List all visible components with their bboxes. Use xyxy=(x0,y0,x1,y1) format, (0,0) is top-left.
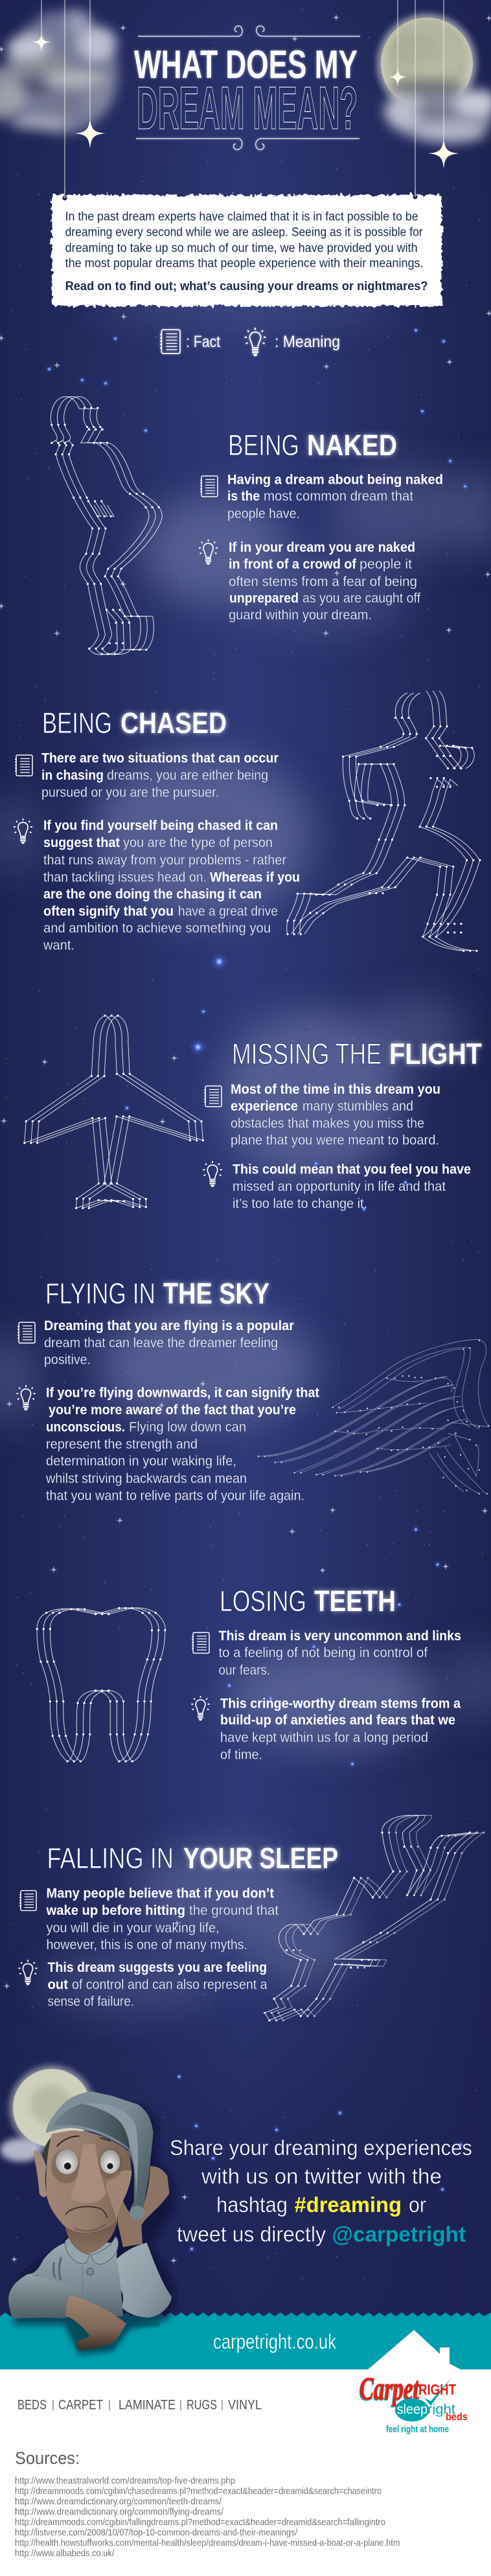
share call to action xyxy=(170,2136,472,2246)
meaning text: out xyxy=(48,1978,68,1993)
icon: meaning xyxy=(14,819,32,844)
man shadow xyxy=(13,2103,176,2355)
heading xyxy=(220,1585,396,1618)
section: being naked xyxy=(51,396,443,655)
meaning text xyxy=(229,540,420,623)
meaning text: This cringe-worthy dream stems from a xyxy=(220,1697,461,1712)
sources: http://listverse.com/2008/10/07/top-10-common-dreams-and-their-meanings/ xyxy=(15,2528,298,2538)
sources xyxy=(15,2448,400,2559)
meaning text xyxy=(43,819,300,953)
intro panel: dreaming to take up so much of our time, we have provided you with xyxy=(65,242,418,255)
fact text xyxy=(44,1318,294,1368)
right sleeve xyxy=(117,2243,172,2318)
cheek on hand xyxy=(106,2171,131,2221)
meaning text: build-up of anxieties and fears that we xyxy=(220,1713,455,1728)
collar left xyxy=(65,2237,89,2263)
meaning text: of control and can also represent a xyxy=(72,1978,268,1993)
left eye socket xyxy=(51,2149,80,2184)
sources: http://dreammoods.com/cgibin/fallingdreams.pl?method=exact&header=dreamid&search=fallingintro xyxy=(15,2518,385,2528)
meaning text: you are the type of person xyxy=(123,835,273,850)
shirt body xyxy=(8,2243,123,2318)
meaning text: and ambition to achieve something you xyxy=(43,921,271,936)
logo: carpetright sleepright beds: right xyxy=(428,2402,455,2417)
fact text: to a feeling of not being in control of xyxy=(219,1645,428,1660)
title ornaments xyxy=(136,26,360,150)
meaning text: are the one doing the chasing it can xyxy=(43,887,262,902)
section: being chased xyxy=(14,691,480,953)
shirt folds xyxy=(19,2258,61,2294)
meaning text: missed an opportunity in life and that xyxy=(233,1179,446,1194)
fact text: people have. xyxy=(227,506,300,521)
meaning text: If you’re flying downwards, it can signify that xyxy=(46,1386,319,1401)
figure: naked constellation xyxy=(51,396,162,655)
share call to action: with us on twitter with the xyxy=(201,2164,442,2188)
title: WHAT DOES MY xyxy=(134,43,358,87)
product list xyxy=(17,2398,262,2413)
meaning text xyxy=(220,1697,461,1763)
right eye socket xyxy=(98,2149,122,2180)
fact text: Dreaming that you are flying is a popular xyxy=(44,1318,294,1333)
icon: fact xyxy=(17,1322,35,1343)
product list: LAMINATE xyxy=(119,2398,176,2413)
section: losing teeth xyxy=(37,1585,461,1763)
sources: http://www.dreamdictionary.org/common/teeth-dreams/ xyxy=(15,2497,222,2507)
fact text: Most of the time in this dream you xyxy=(231,1082,440,1097)
fact text: is the xyxy=(227,489,260,504)
figure: plane constellation xyxy=(25,1015,203,1208)
fact text: This dream is very uncommon and links xyxy=(219,1629,461,1644)
share call to action: tweet us directly xyxy=(177,2222,326,2246)
heading xyxy=(42,706,227,740)
meaning text: unprepared xyxy=(229,591,299,606)
hair xyxy=(43,2135,53,2166)
title xyxy=(134,43,358,142)
figure: wing constellation xyxy=(258,1339,488,1494)
logo: carpetright sleepright beds: sleep xyxy=(397,2402,428,2417)
meaning text: that you want to relive parts of your life again. xyxy=(46,1489,304,1504)
figure: runner constellation xyxy=(287,691,480,951)
sources: http://www.dreamdictionary.org/common/flying-dreams/ xyxy=(15,2507,224,2518)
meaning text: you’re more aware of the fact that you’re xyxy=(49,1403,296,1418)
website url: carpetright.co.uk xyxy=(213,2330,337,2353)
heading: YOUR SLEEP xyxy=(183,1842,338,1875)
intro panel: In the past dream experts have claimed that it is in fact possible to be xyxy=(65,210,418,224)
placket xyxy=(82,2265,84,2299)
icon: fact xyxy=(192,1633,209,1653)
meaning text xyxy=(233,1162,471,1212)
heading: LOSING xyxy=(220,1585,306,1618)
head xyxy=(46,2130,131,2233)
heading xyxy=(45,1277,269,1310)
legend: : Fact xyxy=(186,333,220,351)
cap band xyxy=(53,2103,130,2149)
meaning text: have a great drive xyxy=(178,904,278,919)
meaning text: This dream suggests you are feeling xyxy=(48,1960,267,1975)
moon: top right xyxy=(377,14,477,113)
legend: : Meaning xyxy=(275,333,340,351)
meaning text: in front of a crowd of xyxy=(229,557,357,572)
fact text: Having a dream about being naked xyxy=(227,473,443,488)
lower hand xyxy=(66,2296,126,2350)
left eye xyxy=(56,2149,78,2175)
pupils xyxy=(64,2163,113,2169)
intro panel: dreaming every second while we are asleep. Seeing as it is possible for xyxy=(65,226,423,240)
heading: NAKED xyxy=(307,429,397,462)
fact text: many stumbles and xyxy=(303,1099,413,1114)
icon: fact xyxy=(15,755,32,776)
icon: meaning xyxy=(199,539,218,565)
meaning text: have kept within us for a long period xyxy=(220,1730,428,1745)
fact text: dreams, you are either being xyxy=(107,768,268,783)
heading xyxy=(228,429,397,462)
product list: BEDS xyxy=(17,2398,47,2413)
section: flying in the sky xyxy=(17,1277,488,1504)
fact text: pursued or you are the pursuer. xyxy=(41,785,219,800)
arm and hand xyxy=(118,2166,170,2247)
heading xyxy=(47,1842,338,1875)
sources: http://www.albabeds.co.uk/ xyxy=(15,2549,115,2559)
cloud: top right xyxy=(384,79,491,143)
meaning text: If you find yourself being chased it can xyxy=(43,819,278,833)
right eye xyxy=(100,2150,120,2174)
meaning text: whilst striving backwards can mean xyxy=(45,1471,247,1486)
meaning text: If in your dream you are naked xyxy=(229,540,415,555)
product list: VINYL xyxy=(228,2398,262,2413)
product list: CARPET xyxy=(58,2398,103,2413)
left sleeve xyxy=(8,2274,76,2318)
moon: behind character xyxy=(0,2066,94,2162)
intro panel xyxy=(52,188,442,306)
mouth xyxy=(66,2207,107,2217)
fact text xyxy=(227,473,443,521)
fact text: experience xyxy=(231,1099,298,1114)
heading: TEETH xyxy=(314,1585,396,1618)
fact text xyxy=(46,1886,279,1952)
figure: tooth constellation xyxy=(37,1608,165,1761)
meaning text: as you are caught off xyxy=(303,591,420,606)
logo: carpetright sleepright beds: RIGHT xyxy=(418,2381,456,2398)
fact text: however, this is one of many myths. xyxy=(47,1938,247,1952)
section: falling in your sleep xyxy=(18,1815,484,2020)
fact text: plane that you were meant to board. xyxy=(231,1133,439,1148)
meaning text: people it xyxy=(360,557,412,572)
share call to action: or xyxy=(409,2193,426,2217)
neck xyxy=(65,2219,118,2255)
icon: fact xyxy=(204,1086,222,1107)
icon: fact xyxy=(200,476,218,497)
fact text: you will die in your waking life, xyxy=(47,1921,219,1936)
fact text: positive. xyxy=(44,1353,91,1368)
meaning text: Whereas if you xyxy=(210,870,300,885)
logo: carpetright sleepright beds: Carpet xyxy=(360,2370,420,2406)
fact text xyxy=(219,1629,461,1678)
fact text: dream that can leave the dreamer feeling xyxy=(44,1336,278,1351)
meaning text: determination in your waking life, xyxy=(46,1454,236,1469)
meaning text: that runs away from your problems - rather xyxy=(43,853,286,868)
fact text: obstacles that makes you miss the xyxy=(231,1116,424,1131)
legend xyxy=(160,328,340,356)
fact text xyxy=(41,751,279,800)
white footer xyxy=(0,2369,491,2576)
meaning text: sense of failure. xyxy=(48,1994,134,2009)
nose xyxy=(71,2143,106,2203)
share call to action: hashtag xyxy=(216,2193,288,2217)
cap pom xyxy=(130,2206,145,2220)
fact text: Many people believe that if you don’t xyxy=(47,1886,274,1901)
meaning text: guard within your dream. xyxy=(229,608,372,623)
sources: http://www.theastralworld.com/dreams/top-five-dreams.php xyxy=(15,2476,235,2487)
meaning text: suggest that xyxy=(43,835,120,850)
meaning text: than tackling issues head on. xyxy=(43,870,207,885)
icon: meaning xyxy=(17,1385,35,1410)
collar right xyxy=(91,2236,119,2265)
product list: RUGS xyxy=(187,2398,217,2413)
fact text: our fears. xyxy=(219,1663,270,1678)
heading: MISSING THE xyxy=(232,1037,382,1070)
chin crease xyxy=(73,2224,106,2231)
fact text: most common dream that xyxy=(264,489,413,504)
meaning text xyxy=(45,1386,319,1504)
intro panel: the most popular dreams that people experience with their meanings. xyxy=(65,256,424,271)
character: worried man in nightcap xyxy=(8,2092,176,2355)
logo: carpetright sleepright beds: beds xyxy=(446,2411,468,2423)
sources: http://dreammoods.com/cgibin/chasedreams.pl?method=exact&header=dreamid&search=chaseintro xyxy=(15,2487,382,2497)
share call to action: #dreaming xyxy=(294,2193,402,2217)
fact text: There are two situations that can occur xyxy=(41,751,279,766)
icon: meaning xyxy=(18,1960,38,1985)
heading: BEING xyxy=(42,706,112,740)
sources: http://health.howstuffworks.com/mental-health/sleep/dreams/dream-i-have-missed-a-boat-or-a-plane.htm xyxy=(15,2538,400,2549)
cloud: top left xyxy=(0,9,119,134)
heading: CHASED xyxy=(120,706,227,740)
heading: FALLING IN xyxy=(47,1842,174,1875)
intro panel: Read on to find out; what’s causing your dreams or nightmares? xyxy=(65,280,428,293)
teal footer band xyxy=(0,2312,491,2369)
fact text xyxy=(231,1082,440,1148)
hanging strings and stars xyxy=(32,0,459,198)
meaning text: it’s too late to change it. xyxy=(233,1197,367,1212)
meaning text: want. xyxy=(43,938,74,953)
heading: FLYING IN xyxy=(45,1277,155,1310)
icon: fact xyxy=(19,1891,36,1910)
share call to action: @carpetright xyxy=(332,2222,466,2246)
nightcap xyxy=(46,2092,154,2219)
cap tail highlight xyxy=(83,2103,138,2202)
house roof shape xyxy=(368,2330,461,2369)
heading: THE SKY xyxy=(163,1277,269,1310)
meaning text: often stems from a fear of being xyxy=(229,574,417,589)
sources: Sources: xyxy=(15,2448,80,2468)
fact text: the ground that xyxy=(189,1903,279,1918)
meaning text: Flying low down can xyxy=(129,1420,246,1435)
hand shadow on teal xyxy=(19,2320,160,2351)
share call to action: Share your dreaming experiences xyxy=(170,2136,472,2160)
figure: falling person constellation xyxy=(265,1815,484,2020)
meaning text: of time. xyxy=(220,1748,262,1763)
meaning text xyxy=(48,1960,268,2009)
meaning text: represent the strength and xyxy=(46,1437,198,1452)
fact text: in chasing xyxy=(41,768,104,783)
logo: carpetright sleepright beds: feel right at home xyxy=(386,2424,449,2435)
meaning text: unconscious. xyxy=(46,1420,125,1435)
shirt button xyxy=(87,2268,93,2275)
section: missing the flight xyxy=(25,1015,482,1212)
icon: meaning xyxy=(203,1161,222,1187)
meaning text: often signify that you xyxy=(43,904,174,919)
logo: carpetright sleepright beds xyxy=(360,2370,468,2435)
fact text: wake up before hitting xyxy=(46,1903,185,1918)
brows xyxy=(57,2136,110,2146)
ear xyxy=(34,2151,47,2197)
meaning text: This could mean that you feel you have xyxy=(233,1162,471,1177)
heading: BEING xyxy=(228,429,299,462)
icon: meaning xyxy=(191,1696,210,1721)
